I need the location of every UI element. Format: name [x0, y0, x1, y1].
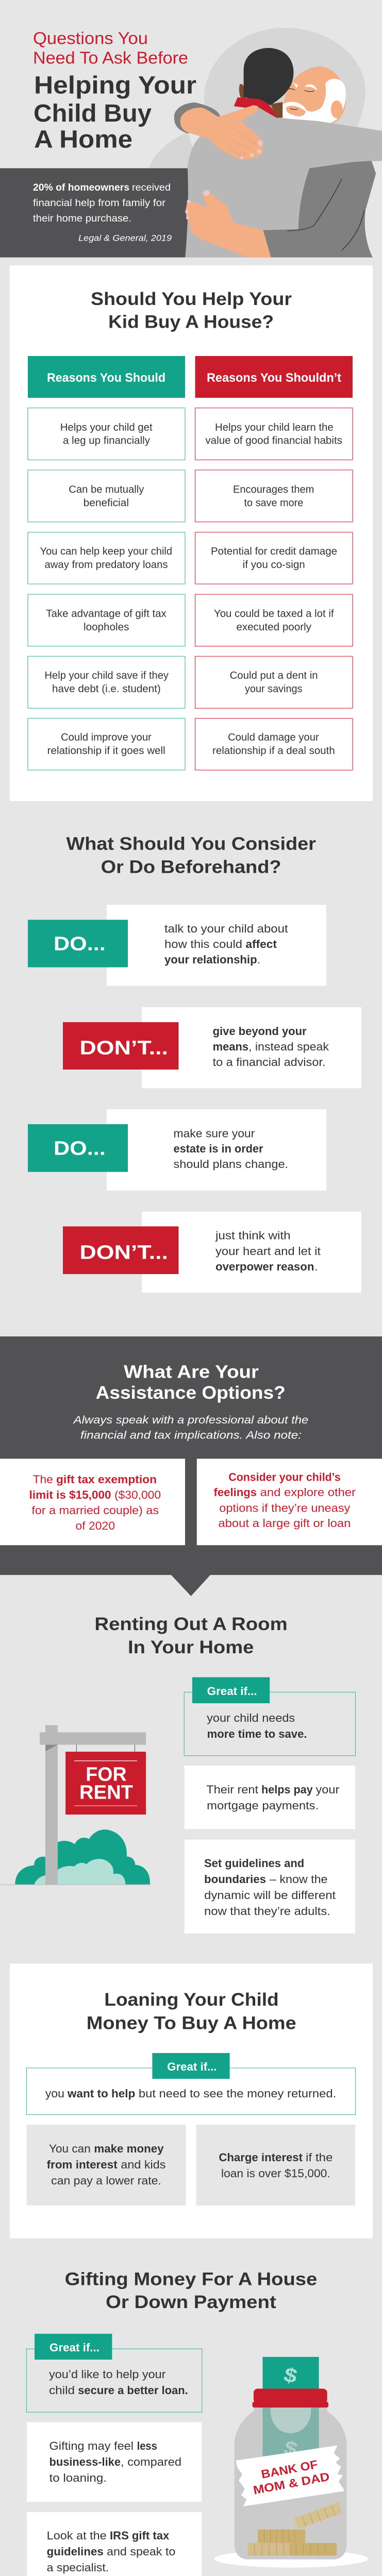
reason row 1: value of good financial habits	[205, 435, 342, 447]
heading: should you help	[91, 289, 292, 332]
card: make money: from interest	[47, 2158, 118, 2171]
title: Need To Ask Before	[33, 48, 188, 67]
reason row 3: if you co-sign	[243, 558, 305, 570]
card: make money: can pay a lower rate.	[51, 2174, 161, 2187]
illustration: bank of mom and dad jar: $	[282, 2436, 300, 2461]
don't card 1: means	[213, 1040, 248, 1053]
card: consider feelings: feelings	[213, 1486, 257, 1499]
heading: loaning	[87, 1990, 296, 2033]
don't card 2	[63, 1212, 361, 1293]
card: gift tax exemption	[0, 1459, 185, 1545]
illustration: bank of mom and dad jar	[214, 2357, 368, 2568]
heading: loaning: Money To Buy A Home	[87, 2013, 296, 2033]
do card 1: how this could	[164, 938, 242, 951]
reason row 3	[28, 532, 353, 584]
column header: reasons you shouldn't: Reasons You Shouldn’t	[207, 371, 341, 385]
title: Helping Your	[34, 72, 196, 99]
heading: what should you consider: Or Do Beforehand?	[101, 857, 281, 877]
don't card 2: .	[314, 1260, 318, 1273]
do card 1: affect	[245, 938, 277, 951]
heading: renting out a room	[94, 1614, 288, 1657]
card: make money: make money	[94, 2142, 164, 2155]
card: consider feelings: options if they’re uneasy	[219, 1501, 350, 1514]
do card 2: DO...	[54, 1138, 106, 1160]
card: charge interest	[196, 2125, 355, 2206]
card: guidelines: now that they’re adults.	[204, 1905, 330, 1918]
heading: what should you consider	[66, 834, 316, 877]
do card 1	[28, 905, 326, 986]
reason row 5: Could put a dent in	[230, 670, 318, 682]
card: irs guidelines: and speak to	[107, 2545, 175, 2558]
panel: loaning	[10, 1963, 373, 2238]
card: consider feelings: about a large gift or loan	[218, 1517, 351, 1530]
heading: assistance options	[96, 1362, 286, 1403]
great if: renting: your child needs	[207, 1711, 295, 1724]
card: make money: You can	[49, 2142, 91, 2155]
hero illustration: father and child hugging	[0, 28, 382, 258]
reason row 5: have debt (i.e. student)	[52, 683, 161, 694]
column header: reasons you shouldn't	[195, 356, 353, 398]
reason row 6: relationship if a deal south	[212, 744, 335, 756]
note text: Always speak with a professional about the	[72, 1414, 308, 1426]
card: irs guidelines: IRS gift tax	[110, 2529, 170, 2542]
reason row 3: You can help keep your child	[40, 546, 172, 557]
card: make money: and kids	[121, 2158, 165, 2171]
great if: gifting	[27, 2334, 202, 2412]
reason row 1: Helps your child learn the	[215, 421, 334, 433]
heading: loaning: Loaning Your Child	[104, 1990, 279, 2010]
great if: gifting: you’d like to help your	[49, 2368, 165, 2381]
heading: renting out a room: Renting Out A Room	[94, 1614, 288, 1634]
card: less business-like: , compared	[121, 2455, 181, 2468]
heading: what should you consider: What Should You Consider	[66, 834, 316, 854]
great if: loaning	[27, 2053, 356, 2114]
card: less business-like: business-like	[49, 2455, 121, 2468]
reason row 4: loopholes	[84, 621, 129, 633]
don't card 1: give beyond your	[213, 1025, 307, 1038]
title	[33, 29, 196, 154]
don't card 1: DON’T...	[79, 1038, 168, 1059]
great if: renting	[184, 1677, 356, 1756]
reason row 5: your savings	[245, 683, 302, 694]
reason row 1: a leg up financially	[63, 435, 151, 447]
card: guidelines	[185, 1840, 355, 1934]
card: guidelines: Set guidelines and	[204, 1857, 304, 1870]
card: charge interest: if the	[306, 2151, 333, 2164]
do card 1: talk to your child about	[164, 922, 288, 935]
card: consider feelings: and explore other	[260, 1486, 356, 1499]
illustration: bank of mom and dad jar: $	[281, 2363, 300, 2387]
card: less business-like: Gifting may feel	[49, 2439, 134, 2452]
card: rent helps	[185, 1766, 355, 1829]
reason row 1	[28, 408, 353, 460]
heading: should you help: Should You Help Your	[91, 289, 292, 309]
card: irs guidelines: guidelines	[47, 2545, 104, 2558]
illustration: for rent sign: FOR	[86, 1764, 127, 1785]
reason row 6: relationship if it goes well	[47, 744, 165, 756]
reason row 1: Helps your child get	[60, 421, 153, 433]
statistic callout: 20% of homeowners	[33, 182, 129, 193]
heading: gifting money: Or Down Payment	[106, 2292, 276, 2312]
illustration: bank of mom and dad jar: BANK OF	[260, 2458, 319, 2481]
card: gift tax exemption: The	[33, 1473, 53, 1486]
do card 2: make sure your	[173, 1127, 255, 1140]
card: rent helps: Their rent	[206, 1783, 258, 1796]
card: gift tax exemption: of 2020	[75, 1519, 115, 1532]
great if: loaning: but need to see the money returned.	[139, 2087, 336, 2100]
great if: gifting: secure a better loan.	[78, 2384, 188, 2397]
reason row 2	[28, 470, 353, 522]
heading: assistance options: What Are Your	[124, 1362, 259, 1382]
reason row 4	[28, 595, 353, 646]
card: make money	[27, 2125, 186, 2206]
card: guidelines: – know the	[270, 1873, 328, 1886]
don't card 2: DON’T...	[79, 1242, 168, 1263]
card: rent helps: your	[315, 1783, 339, 1796]
statistic callout: financial help from family for	[33, 197, 166, 209]
title: Child Buy	[34, 100, 152, 127]
card: irs guidelines: Look at the	[47, 2529, 107, 2542]
reason row 3: away from predatory loans	[44, 558, 168, 570]
great if: gifting: Great if...	[49, 2341, 99, 2354]
don't card 1: to a financial advisor.	[213, 1056, 325, 1069]
do card 1: your relationship	[164, 953, 257, 966]
statistic callout: their home purchase.	[33, 213, 131, 224]
card: less business-like: to loaning.	[49, 2471, 107, 2484]
reason row 3: Potential for credit damage	[211, 546, 337, 557]
reason row 6	[28, 718, 353, 770]
card: guidelines: dynamic will be different	[204, 1889, 336, 1902]
note text	[72, 1414, 308, 1442]
do card 2: should plans change.	[173, 1158, 288, 1171]
title: A Home	[34, 126, 132, 154]
card: charge interest: Charge interest	[219, 2151, 303, 2164]
reason row 2: Can be mutually	[69, 484, 144, 496]
statistic callout	[33, 182, 172, 243]
reason row 5	[28, 656, 353, 708]
statistic callout: received	[132, 182, 171, 193]
card: charge interest: loan is over $15,000.	[221, 2167, 330, 2180]
reason row 2: beneficial	[84, 497, 129, 509]
great if: renting: Great if...	[207, 1685, 257, 1698]
card: rent helps: mortgage payments.	[207, 1799, 319, 1812]
great if: renting: more time to save.	[207, 1727, 307, 1740]
card: consider feelings	[197, 1459, 382, 1545]
great if: gifting: child	[49, 2384, 75, 2397]
do card 1: .	[257, 953, 260, 966]
illustration: for rent sign	[0, 1725, 151, 1885]
heading: should you help: Kid Buy A House?	[108, 312, 274, 332]
card: less business-like	[27, 2422, 202, 2502]
statistic callout: Legal & General, 2019	[78, 233, 172, 243]
reason row 6: Could improve your	[61, 732, 152, 743]
don't card 1	[63, 1007, 361, 1088]
card: gift tax exemption: limit is $15,000	[29, 1488, 111, 1501]
do card 2: estate is in order	[173, 1142, 263, 1155]
do card 1: DO...	[54, 934, 106, 955]
panel: should you help	[10, 265, 373, 801]
card: less business-like: less	[137, 2439, 157, 2452]
don't card 2: your heart and let it	[215, 1245, 321, 1258]
don't card 2: overpower reason	[215, 1260, 314, 1273]
reason row 4: Take advantage of gift tax	[46, 608, 167, 620]
illustration: bank of mom and dad jar: MOM & DAD	[252, 2470, 330, 2497]
great if: loaning: you	[45, 2087, 64, 2100]
card: gift tax exemption: ($30,000	[114, 1488, 161, 1501]
reason row 6: Could damage your	[228, 732, 319, 743]
panel: assistance options	[0, 1336, 382, 1596]
illustration: for rent sign: RENT	[79, 1782, 133, 1803]
card: consider feelings: Consider your child’s	[228, 1470, 341, 1483]
card: irs guidelines: a specialist.	[47, 2561, 109, 2574]
title: Questions You	[33, 29, 148, 48]
heading: gifting money: Gifting Money For A House	[65, 2269, 317, 2290]
don't card 1: , instead speak	[248, 1040, 329, 1053]
card: rent helps: helps pay	[261, 1783, 313, 1796]
reason row 2: to save more	[244, 497, 303, 509]
great if: loaning: Great if...	[167, 2060, 217, 2073]
do card 2	[28, 1109, 326, 1191]
reason row 5: Help your child save if they	[44, 670, 169, 682]
reason row 2: Encourages them	[233, 484, 314, 496]
heading: renting out a room: In Your Home	[128, 1637, 254, 1657]
column header: reasons you should	[28, 356, 185, 398]
heading: gifting money	[65, 2269, 317, 2312]
note text: financial and tax implications. Also note:	[80, 1430, 302, 1442]
heading: assistance options: Assistance Options?	[96, 1383, 286, 1403]
card: guidelines: boundaries	[204, 1873, 266, 1886]
card: irs guidelines	[27, 2512, 202, 2576]
great if: loaning: want to help	[67, 2087, 135, 2100]
don't card 2: just think with	[215, 1229, 291, 1242]
card: gift tax exemption: gift tax exemption	[56, 1473, 157, 1486]
column header: reasons you should: Reasons You Should	[47, 371, 165, 385]
reason row 4: executed poorly	[236, 621, 312, 633]
reason row 4: You could be taxed a lot if	[214, 608, 334, 620]
card: gift tax exemption: for a married couple) as	[31, 1504, 159, 1517]
